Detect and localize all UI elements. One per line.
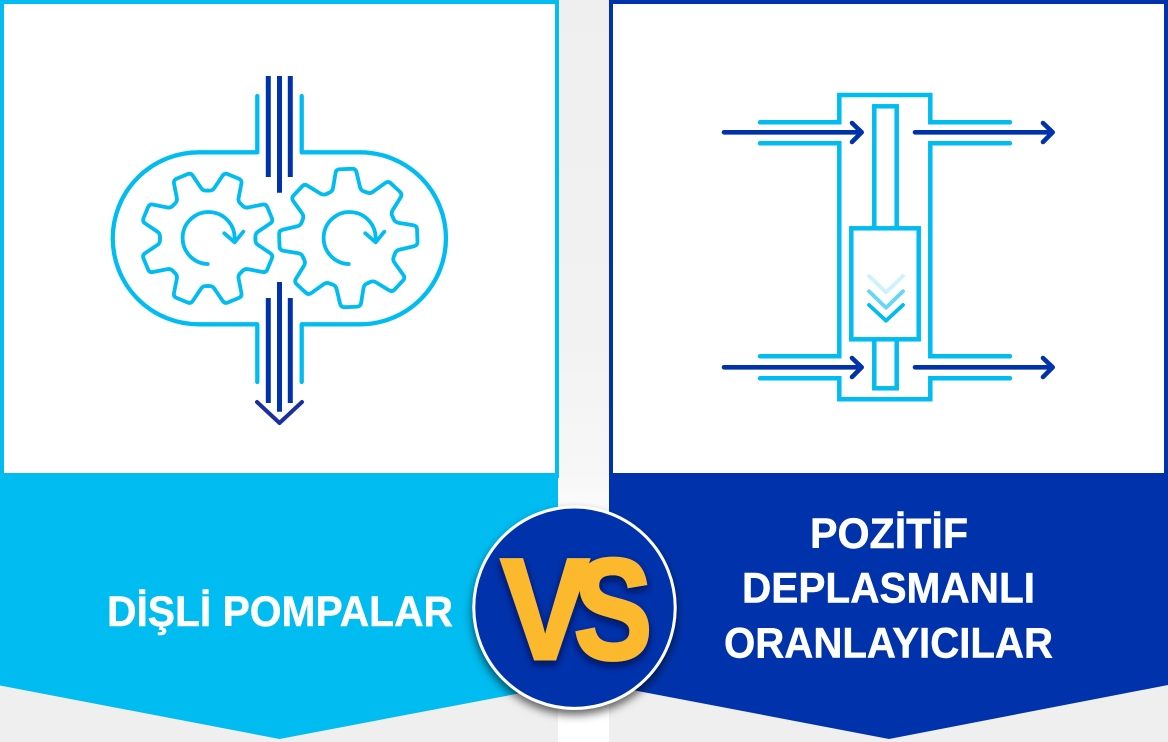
flow lines in <box>268 76 290 193</box>
left gear <box>139 169 277 307</box>
arrow: bottom outlet <box>915 358 1053 377</box>
heading: dosing pumps: POZİTİF <box>810 510 968 558</box>
heading: dosing pumps <box>724 510 1053 668</box>
icon: gear pump <box>113 76 446 423</box>
arrow: top inlet <box>724 123 862 142</box>
illustration frame: dosing pumps <box>611 2 1166 476</box>
rotation arrow: right gear <box>324 212 384 264</box>
arrow: bottom inlet <box>724 358 862 377</box>
badge circle <box>474 507 675 708</box>
VS badge <box>474 507 675 708</box>
panel: positive displacement dosing pumps <box>609 2 1168 739</box>
VS label <box>501 530 652 690</box>
banner: dosing pumps <box>609 473 1168 739</box>
arrow: top outlet <box>915 123 1053 142</box>
piston rod <box>874 106 897 388</box>
flow lines out <box>268 282 290 412</box>
VS label: V <box>501 530 589 690</box>
illustration frame: gear pumps <box>2 2 557 476</box>
panel: gear pumps <box>0 2 558 739</box>
heading: gear pumps: DİŞLİ POMPALAR <box>107 588 453 636</box>
banner: gear pumps <box>0 473 558 739</box>
pump body <box>760 95 1010 399</box>
chevrons: piston direction <box>869 276 903 321</box>
piston head <box>851 228 919 339</box>
VS label: S <box>574 530 652 690</box>
pump casing <box>113 96 446 382</box>
rotation arrow: left gear <box>183 212 243 264</box>
icon: dosing pump <box>724 95 1053 399</box>
heading: dosing pumps: ORANLAYICILAR <box>724 620 1053 668</box>
heading: dosing pumps: DEPLASMANLI <box>742 564 1035 612</box>
arrowhead: flow out <box>257 402 302 423</box>
right gear <box>277 167 420 309</box>
